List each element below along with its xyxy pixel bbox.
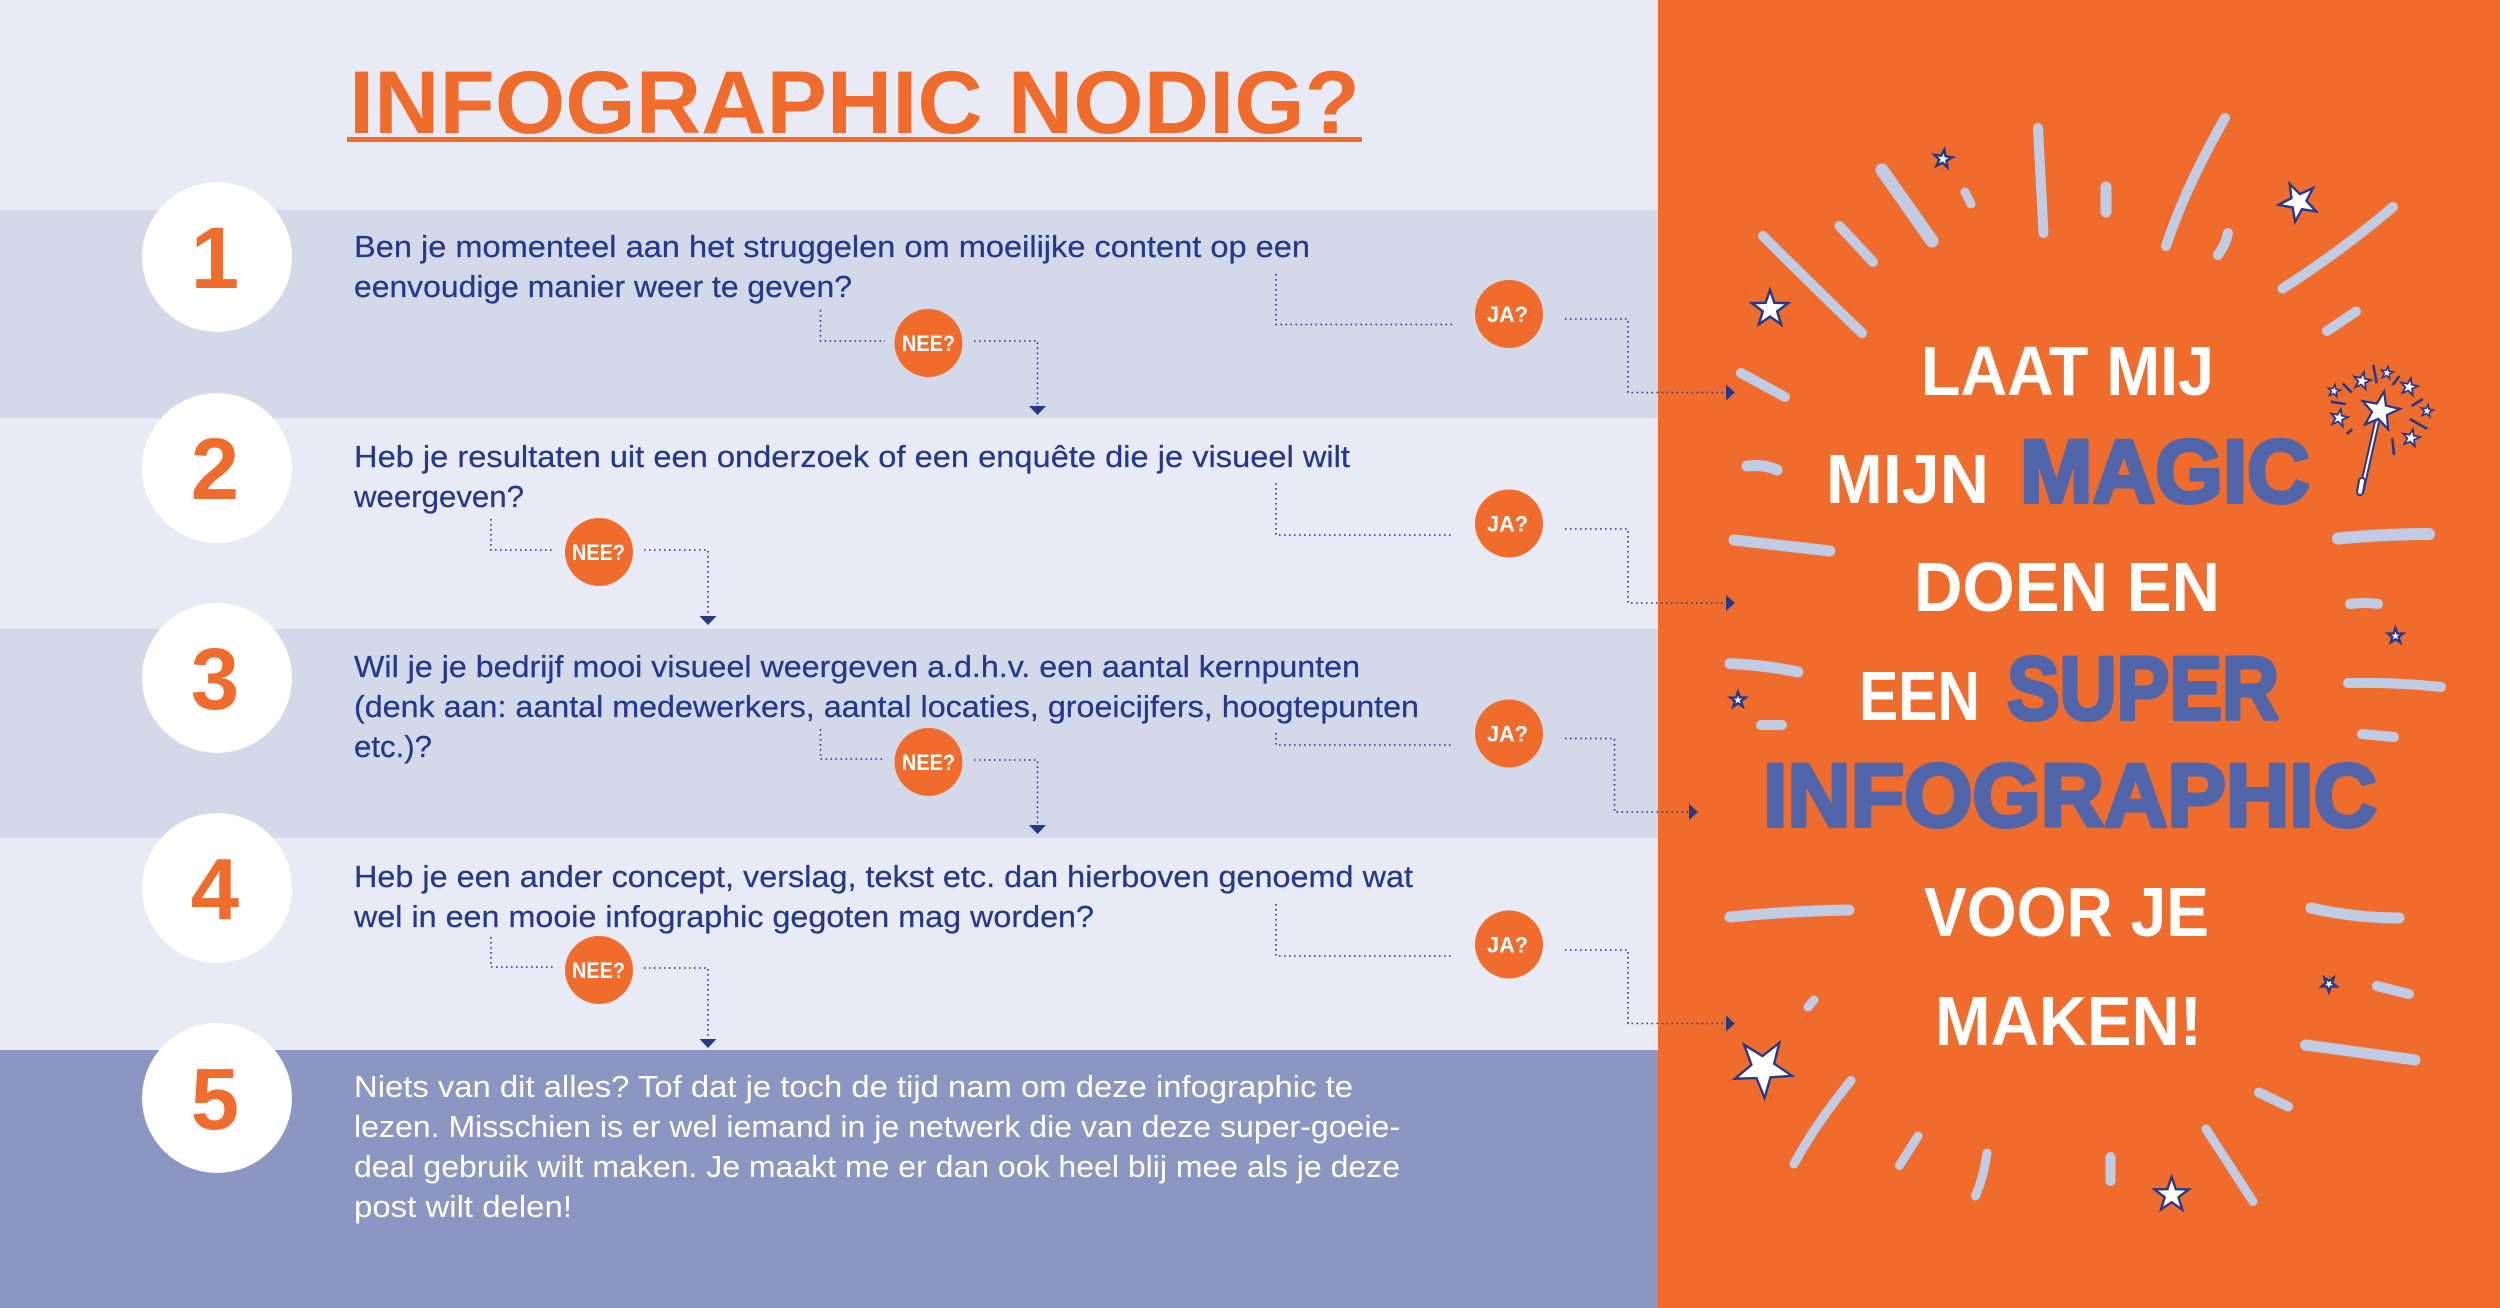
- closing text: post wilt delen!: [354, 1189, 572, 1224]
- number badge 1: 1: [191, 210, 239, 307]
- closing text: Niets van dit alles? Tof dat je toch de tijd nam om deze infographic te: [354, 1069, 1353, 1104]
- NEE connector 4: [491, 936, 716, 1048]
- NEE connector 3: NEE?: [902, 750, 955, 775]
- question text 4: wel in een mooie infographic gegoten mag worden?: [353, 899, 1094, 934]
- JA connector 2: [1276, 483, 1735, 611]
- call to action message: SUPER: [2007, 638, 2279, 738]
- panel: orange call to action background: [1658, 0, 2500, 1308]
- call to action message: LAAT MIJ: [1921, 332, 2214, 410]
- call to action message: MAGIC: [2020, 421, 2310, 521]
- question text 2: [353, 439, 1350, 514]
- call to action message: [1763, 332, 2377, 1060]
- call to action message: MAKEN!: [1935, 982, 2202, 1060]
- question text 3: Wil je je bedrijf mooi visueel weergeven a.d.h.v. een aantal kernpunten: [354, 649, 1360, 684]
- icon: magic wand: [2327, 365, 2434, 493]
- NEE connector 1: [820, 309, 1046, 415]
- JA connector 3: [1276, 700, 1698, 820]
- call to action message: INFOGRAPHIC: [1763, 745, 2377, 845]
- question text 1: [354, 229, 1310, 304]
- NEE connector 3: [820, 728, 1046, 834]
- number badge 5: [142, 1023, 292, 1173]
- decorative rays around the message: [1730, 118, 2441, 1202]
- decorative stars: [1730, 148, 2403, 1210]
- closing text: lezen. Misschien is er wel iemand in je netwerk die van deze super-goeie-: [354, 1109, 1400, 1144]
- number badge 3: [142, 603, 292, 753]
- JA connector 1: JA?: [1487, 302, 1528, 327]
- number badge 3: 3: [191, 631, 239, 728]
- question text 2: weergeven?: [353, 479, 524, 514]
- question text 1: eenvoudige manier weer te geven?: [354, 269, 852, 304]
- NEE connector 1: NEE?: [902, 331, 955, 356]
- number badge 2: [142, 393, 292, 543]
- JA connector 4: [1276, 904, 1735, 1032]
- JA connector 4: JA?: [1487, 932, 1528, 958]
- panel: closing message 5: [0, 1023, 1658, 1308]
- background: [0, 0, 1658, 1308]
- question text 3: (denk aan: aantal medewerkers, aantal locaties, groeicijfers, hoogtepunten: [354, 689, 1419, 724]
- number badge 2: 2: [191, 421, 239, 518]
- call to action message: DOEN EN: [1914, 548, 2220, 626]
- question text 4: Heb je een ander concept, verslag, tekst etc. dan hierboven genoemd wat: [354, 859, 1413, 894]
- JA connector 2: JA?: [1487, 512, 1528, 536]
- NEE connector 2: NEE?: [572, 540, 625, 565]
- NEE connector 4: NEE?: [572, 958, 625, 983]
- NEE connector 2: [491, 518, 716, 625]
- question text 3: [354, 649, 1419, 764]
- question text 4: [353, 859, 1413, 934]
- number badge 5: 5: [191, 1051, 239, 1148]
- closing text: [354, 1069, 1400, 1224]
- number badge 4: 4: [191, 841, 239, 938]
- JA connector 1: [1276, 274, 1735, 400]
- JA connector 3: JA?: [1487, 722, 1528, 746]
- call to action message: MIJN: [1826, 440, 1989, 518]
- panel: question 1: [0, 182, 1735, 418]
- call to action message: EEN: [1859, 657, 1980, 735]
- panel: question 2: [0, 393, 1735, 629]
- question text 2: Heb je resultaten uit een onderzoek of een enquête die je visueel wilt: [354, 439, 1350, 474]
- closing text: deal gebruik wilt maken. Je maakt me er dan ook heel blij mee als je deze: [354, 1149, 1400, 1184]
- panel: question 4: [0, 813, 1735, 1050]
- number badge 1: [142, 182, 292, 332]
- question text 3: etc.)?: [354, 729, 432, 764]
- call to action message: VOOR JE: [1924, 873, 2209, 951]
- number badge 4: [142, 813, 292, 963]
- panel: question 3: [0, 603, 1698, 838]
- question text 1: Ben je momenteel aan het struggelen om moeilijke content op een: [354, 229, 1310, 264]
- title: INFOGRAPHIC NODIG?: [349, 52, 1360, 152]
